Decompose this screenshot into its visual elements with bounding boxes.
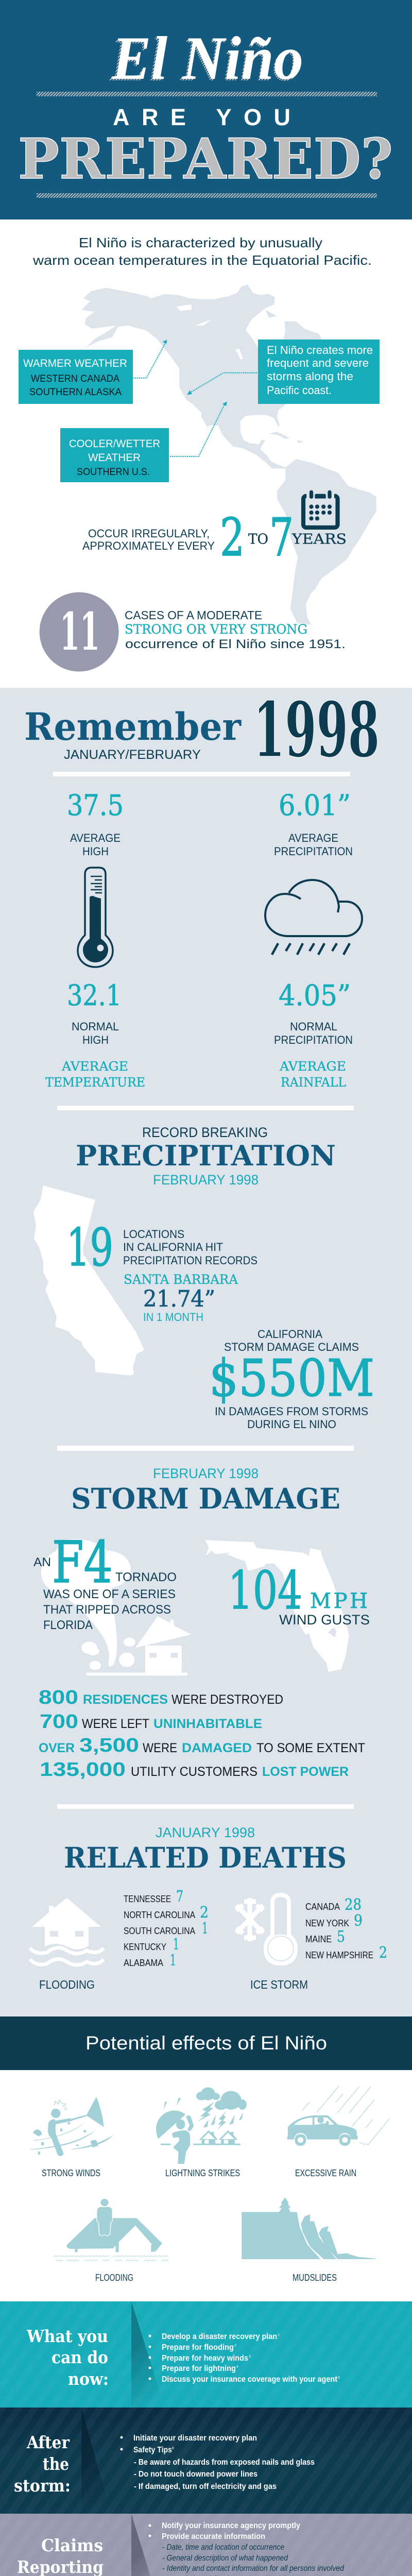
- stat: 2 to 7 years: 2: [220, 507, 245, 568]
- banner: potential effects: [0, 2016, 412, 2070]
- panel: temperature column: AVERAGE: [61, 1059, 128, 1074]
- stat: 11 cases: 11: [60, 601, 100, 662]
- stat: F4 tornado: FLORIDA: [43, 1618, 93, 1632]
- list: flood deaths by state: 2: [200, 1904, 209, 1922]
- callout: warmer weather: WESTERN CANADA: [31, 374, 119, 384]
- stat: santa barbara: [124, 1272, 238, 1324]
- list: claims tips: Provide accurate information: [162, 2532, 265, 2541]
- list: safety tips: Initiate your disaster recovery plan: [133, 2434, 257, 2443]
- list: ice storm deaths by place: 9: [354, 1912, 363, 1930]
- effect: mudslides: MUDSLIDES: [293, 2273, 337, 2283]
- list: claims tips: - Date, time and location of occurrence: [162, 2543, 284, 2552]
- heading: related deaths: [64, 1825, 347, 1874]
- stat: F4 tornado: TORNADO: [115, 1570, 177, 1584]
- panel: rainfall column: PRECIPITATION: [274, 1033, 353, 1046]
- effect: mudslides: [242, 2197, 376, 2283]
- heading: storm damage: [71, 1466, 340, 1515]
- heading: related deaths: RELATED DEATHS: [64, 1841, 347, 1874]
- stats: damage list: RESIDENCES: [83, 1692, 168, 1707]
- callout: more storms: El Niño creates more: [267, 344, 373, 357]
- stat: 11 cases: CASES OF A MODERATE: [125, 608, 262, 622]
- stats: damage list: [39, 1687, 365, 1781]
- stat: $550M claims: IN DAMAGES FROM STORMS: [215, 1405, 368, 1418]
- arrow: pacific storms: [187, 373, 257, 395]
- list: ice storm deaths by place: NEW HAMPSHIRE: [305, 1950, 373, 1960]
- stat: 104 mph wind gusts: [228, 1560, 370, 1628]
- stat: F4 tornado: WAS ONE OF A SERIES: [43, 1587, 176, 1601]
- stat: 19 locations: [66, 1217, 258, 1278]
- list: safety tips: - If damaged, turn off electricity and gas: [134, 2482, 277, 2491]
- list: ice storm deaths by place: [305, 1896, 387, 1962]
- stat: $550M claims: DURING EL NINO: [247, 1418, 336, 1431]
- stat: 2 to 7 years: APPROXIMATELY EVERY: [82, 539, 215, 552]
- icon: california map: [33, 1185, 144, 1376]
- stats: damage list: UTILITY CUSTOMERS: [131, 1765, 258, 1779]
- list: flood deaths by state: [124, 1888, 209, 1970]
- list: actions: Prepare for flooding: [162, 2343, 234, 2352]
- stats: damage list: 135,000: [40, 1759, 126, 1781]
- panel: temperature column: 32.1: [67, 979, 122, 1012]
- stat: $550M claims: $550M: [209, 1349, 374, 1408]
- stat: 11 cases: occurrence of El Niño since 1951.: [125, 637, 346, 651]
- stat: 2 to 7 years: 7: [269, 507, 294, 568]
- callout: cooler wetter weather: [60, 428, 169, 482]
- stat: 19 locations: PRECIPITATION RECORDS: [123, 1254, 258, 1267]
- list: safety tips: - Be aware of hazards from exposed nails and glass: [134, 2458, 315, 2467]
- heading: after the storm: the: [43, 2454, 69, 2474]
- list: flood deaths by state: SOUTH CAROLINA: [124, 1926, 195, 1936]
- callout: warmer weather: [19, 350, 133, 404]
- heading: after the storm: After: [26, 2432, 70, 2452]
- heading: claims reporting tips: Claims: [41, 2535, 103, 2555]
- stat: $550M claims: [209, 1328, 374, 1431]
- list: safety tips: - Do not touch downed power lines: [134, 2470, 258, 2479]
- stat: F4 tornado: AN: [33, 1555, 51, 1569]
- panel: remember 1998 background: [0, 688, 412, 2016]
- panel: rainfall column: AVERAGE: [288, 832, 338, 844]
- heading: what you can do now: [26, 2326, 109, 2389]
- callout: warmer weather: SOUTHERN ALASKA: [29, 387, 122, 398]
- icon: mudslide: [242, 2197, 376, 2259]
- heading: remember 1998: Remember: [24, 705, 242, 749]
- heading: what you can do now: What you: [26, 2326, 108, 2346]
- list: claims tips: - Identity and contact information for all persons involved: [162, 2564, 345, 2573]
- heading: what you can do now: now:: [68, 2369, 109, 2389]
- effect: excessive rain: [287, 2086, 389, 2178]
- effect: strong winds: STRONG WINDS: [42, 2168, 100, 2178]
- stats: damage list: 800: [39, 1687, 78, 1708]
- icon: flooded house: [30, 1898, 104, 1965]
- list: ice storm deaths by place: CANADA: [305, 1902, 340, 1912]
- heading: claims reporting tips: [17, 2535, 108, 2576]
- list: actions: 2: [234, 2344, 236, 2348]
- list: claims tips: - General description of what happened: [162, 2554, 288, 2563]
- icon: car in rain: [287, 2086, 389, 2146]
- list: flood deaths by state: 7: [176, 1888, 183, 1906]
- stat: 2 to 7 years: OCCUR IRREGULARLY,: [88, 527, 210, 540]
- stat: santa barbara: IN 1 MONTH: [143, 1311, 203, 1324]
- stats: damage list: 700: [40, 1711, 78, 1733]
- heading: after the storm: storm:: [14, 2476, 71, 2496]
- stats: damage list: LOST POWER: [262, 1765, 349, 1779]
- panel: rainfall column: NORMAL: [290, 1020, 337, 1033]
- heading: storm damage: STORM DAMAGE: [71, 1482, 340, 1515]
- stat: F4 tornado: THAT RIPPED ACROSS: [43, 1603, 171, 1617]
- stat: F4 tornado: [33, 1530, 177, 1632]
- arrow: cooler weather: [170, 401, 227, 456]
- panel: rainfall column: AVERAGE: [279, 1059, 346, 1074]
- panel: rainfall column: RAINFALL: [281, 1075, 346, 1090]
- stats: damage list: 3,500: [79, 1735, 139, 1756]
- panel: ice storm deaths: ICE STORM: [250, 1978, 308, 1991]
- heading: record breaking precipitation: [76, 1125, 336, 1188]
- panel: rainfall column: 6.01”: [279, 789, 351, 822]
- stat: 19 locations: 19: [66, 1217, 113, 1278]
- panel: what you can do now: [0, 2301, 412, 2408]
- stats: damage list: TO SOME EXTENT: [256, 1741, 365, 1755]
- title: El Niño: El Niño: [111, 24, 303, 92]
- stats: damage list: WERE LEFT: [82, 1717, 149, 1731]
- stat: 104 mph wind gusts: 104: [228, 1560, 302, 1621]
- callout: more storms: storms along the: [267, 370, 353, 383]
- stat: 104 mph wind gusts: MPH: [310, 1589, 368, 1613]
- stats: damage list: UNINHABITABLE: [153, 1717, 262, 1731]
- callout: warmer weather: WARMER WEATHER: [23, 358, 127, 369]
- list: actions: Prepare for lightning: [162, 2364, 236, 2373]
- icon: person on roof in flood: [54, 2199, 168, 2261]
- panel: ice storm deaths: [236, 1893, 387, 1991]
- list: actions: 4: [236, 2365, 238, 2369]
- stat: 2 to 7 years: TO: [248, 532, 268, 547]
- stat: 104 mph wind gusts: WIND GUSTS: [279, 1612, 370, 1628]
- list: flood deaths by state: 1: [202, 1920, 208, 1938]
- panel: temperature column: HIGH: [82, 1033, 109, 1046]
- list: actions: Develop a disaster recovery plan: [162, 2332, 277, 2341]
- panel: temperature column: AVERAGE: [70, 832, 121, 844]
- panel: header: [0, 0, 412, 219]
- list: claims tips: [148, 2521, 370, 2576]
- banner: potential effects: Potential effects of El Niño: [85, 2032, 327, 2054]
- list: flood deaths by state: TENNESSEE: [124, 1894, 171, 1904]
- list: flood deaths by state: NORTH CAROLINA: [124, 1910, 195, 1920]
- heading: after the storm: [14, 2432, 71, 2496]
- callout: more storms: frequent and severe: [267, 357, 369, 369]
- stat: $550M claims: CALIFORNIA: [258, 1328, 322, 1341]
- panel: temperature column: NORMAL: [72, 1020, 119, 1033]
- list: actions: 5: [338, 2376, 340, 2380]
- panel: rainfall column: [265, 789, 362, 1090]
- icon: lightning storm: [156, 2087, 247, 2164]
- list: actions: Prepare for heavy winds: [162, 2354, 248, 2363]
- stats: damage list: DAMAGED: [182, 1741, 252, 1755]
- intro text: [32, 235, 372, 268]
- heading: remember 1998: [24, 685, 380, 774]
- list: flood deaths by state: KENTUCKY: [124, 1942, 166, 1952]
- heading: related deaths: JANUARY 1998: [156, 1825, 255, 1840]
- list: safety tips: [121, 2434, 315, 2491]
- list: actions: Discuss your insurance coverage with your agent: [162, 2375, 337, 2384]
- stats: damage list: WERE: [143, 1741, 177, 1755]
- icon: thermometer: [78, 868, 113, 967]
- panel: flooding deaths: [30, 1888, 209, 1991]
- panel: temperature column: [45, 789, 145, 1090]
- list: claims tips: Notify your insurance agency promptly: [162, 2521, 300, 2530]
- panel: claims reporting tips: [0, 2514, 412, 2576]
- icon: florida map: [205, 1540, 349, 1672]
- effect: flooding: [54, 2199, 168, 2283]
- stats: damage list: OVER: [39, 1741, 75, 1755]
- panel: temperature column: 37.5: [67, 789, 124, 822]
- title: El Niño: El Niño: [109, 25, 302, 94]
- map: the Americas: [82, 284, 376, 625]
- subtitle: are you: ARE YOU: [113, 104, 290, 130]
- icon: snowflake and thermometer: [236, 1893, 298, 1965]
- list: ice storm deaths by place: MAINE: [305, 1934, 332, 1944]
- heading: remember 1998: JANUARY/FEBRUARY: [64, 748, 201, 762]
- effect: lightning strikes: LIGHTNING STRIKES: [165, 2168, 240, 2178]
- panel: after the storm: [0, 2408, 412, 2514]
- stat: 11 cases: STRONG OR VERY STRONG: [125, 622, 307, 637]
- callout: cooler wetter weather: WEATHER: [88, 452, 141, 464]
- panel: temperature column: HIGH: [82, 845, 109, 858]
- heading: record breaking precipitation: PRECIPITATION: [76, 1139, 336, 1172]
- heading: storm damage: FEBRUARY 1998: [153, 1466, 259, 1481]
- list: actions: 3: [249, 2355, 251, 2359]
- icon: rain cloud: [265, 880, 362, 955]
- stat: 11 cases: [40, 592, 346, 672]
- callout: cooler wetter weather: COOLER/WETTER: [69, 438, 160, 450]
- list: ice storm deaths by place: 5: [337, 1928, 345, 1946]
- list: safety tips: 6: [172, 2447, 174, 2450]
- list: flood deaths by state: 1: [170, 1952, 176, 1970]
- list: ice storm deaths by place: NEW YORK: [305, 1918, 349, 1928]
- list: flood deaths by state: ALABAMA: [124, 1958, 163, 1968]
- callout: more storms: Pacific coast.: [267, 384, 332, 397]
- icon: strong winds: [29, 2097, 113, 2156]
- stat: 2 to 7 years: YEARS: [291, 532, 347, 547]
- list: ice storm deaths by place: 2: [379, 1944, 387, 1962]
- icon: tornado and house: [41, 1539, 192, 1675]
- stat: 2 to 7 years: [82, 490, 347, 568]
- stat: santa barbara: 21.74”: [143, 1286, 215, 1312]
- panel: rainfall column: PRECIPITATION: [274, 845, 353, 858]
- list: flood deaths by state: 1: [173, 1936, 179, 1954]
- stats: damage list: WERE DESTROYED: [171, 1692, 283, 1707]
- heading: record breaking precipitation: RECORD BREAKING: [142, 1125, 268, 1140]
- intro text: El Niño is characterized by unusually: [79, 235, 322, 250]
- list: ice storm deaths by place: 28: [345, 1896, 362, 1914]
- effect: lightning strikes: [156, 2087, 247, 2178]
- panel: rainfall column: 4.05”: [279, 979, 351, 1012]
- list: safety tips: Safety Tips: [133, 2446, 172, 2454]
- heading: what you can do now: can do: [52, 2347, 108, 2367]
- callout: cooler wetter weather: SOUTHERN U.S.: [77, 467, 150, 478]
- icon: calendar: [303, 490, 338, 528]
- effect: flooding: FLOODING: [95, 2273, 133, 2283]
- stat: 19 locations: IN CALIFORNIA HIT: [123, 1241, 223, 1253]
- arrow: warmer weather: [133, 340, 167, 378]
- stat: 19 locations: LOCATIONS: [123, 1228, 184, 1241]
- stat: F4 tornado: F4: [52, 1530, 113, 1596]
- callout: more storms: [258, 340, 380, 404]
- stat: santa barbara: SANTA BARBARA: [124, 1272, 238, 1287]
- panel: flooding deaths: FLOODING: [39, 1978, 95, 1991]
- effect: excessive rain: EXCESSIVE RAIN: [295, 2168, 356, 2178]
- panel: temperature column: TEMPERATURE: [45, 1075, 145, 1090]
- stat: $550M claims: STORM DAMAGE CLAIMS: [224, 1341, 359, 1353]
- intro text: warm ocean temperatures in the Equatorial Pacific.: [32, 252, 372, 268]
- list: actions: 1: [278, 2333, 280, 2337]
- list: actions: [148, 2332, 340, 2384]
- heading: record breaking precipitation: FEBRUARY 1998: [153, 1172, 259, 1188]
- effect: strong winds: [29, 2097, 113, 2178]
- title: prepared: PREPARED?: [18, 127, 393, 192]
